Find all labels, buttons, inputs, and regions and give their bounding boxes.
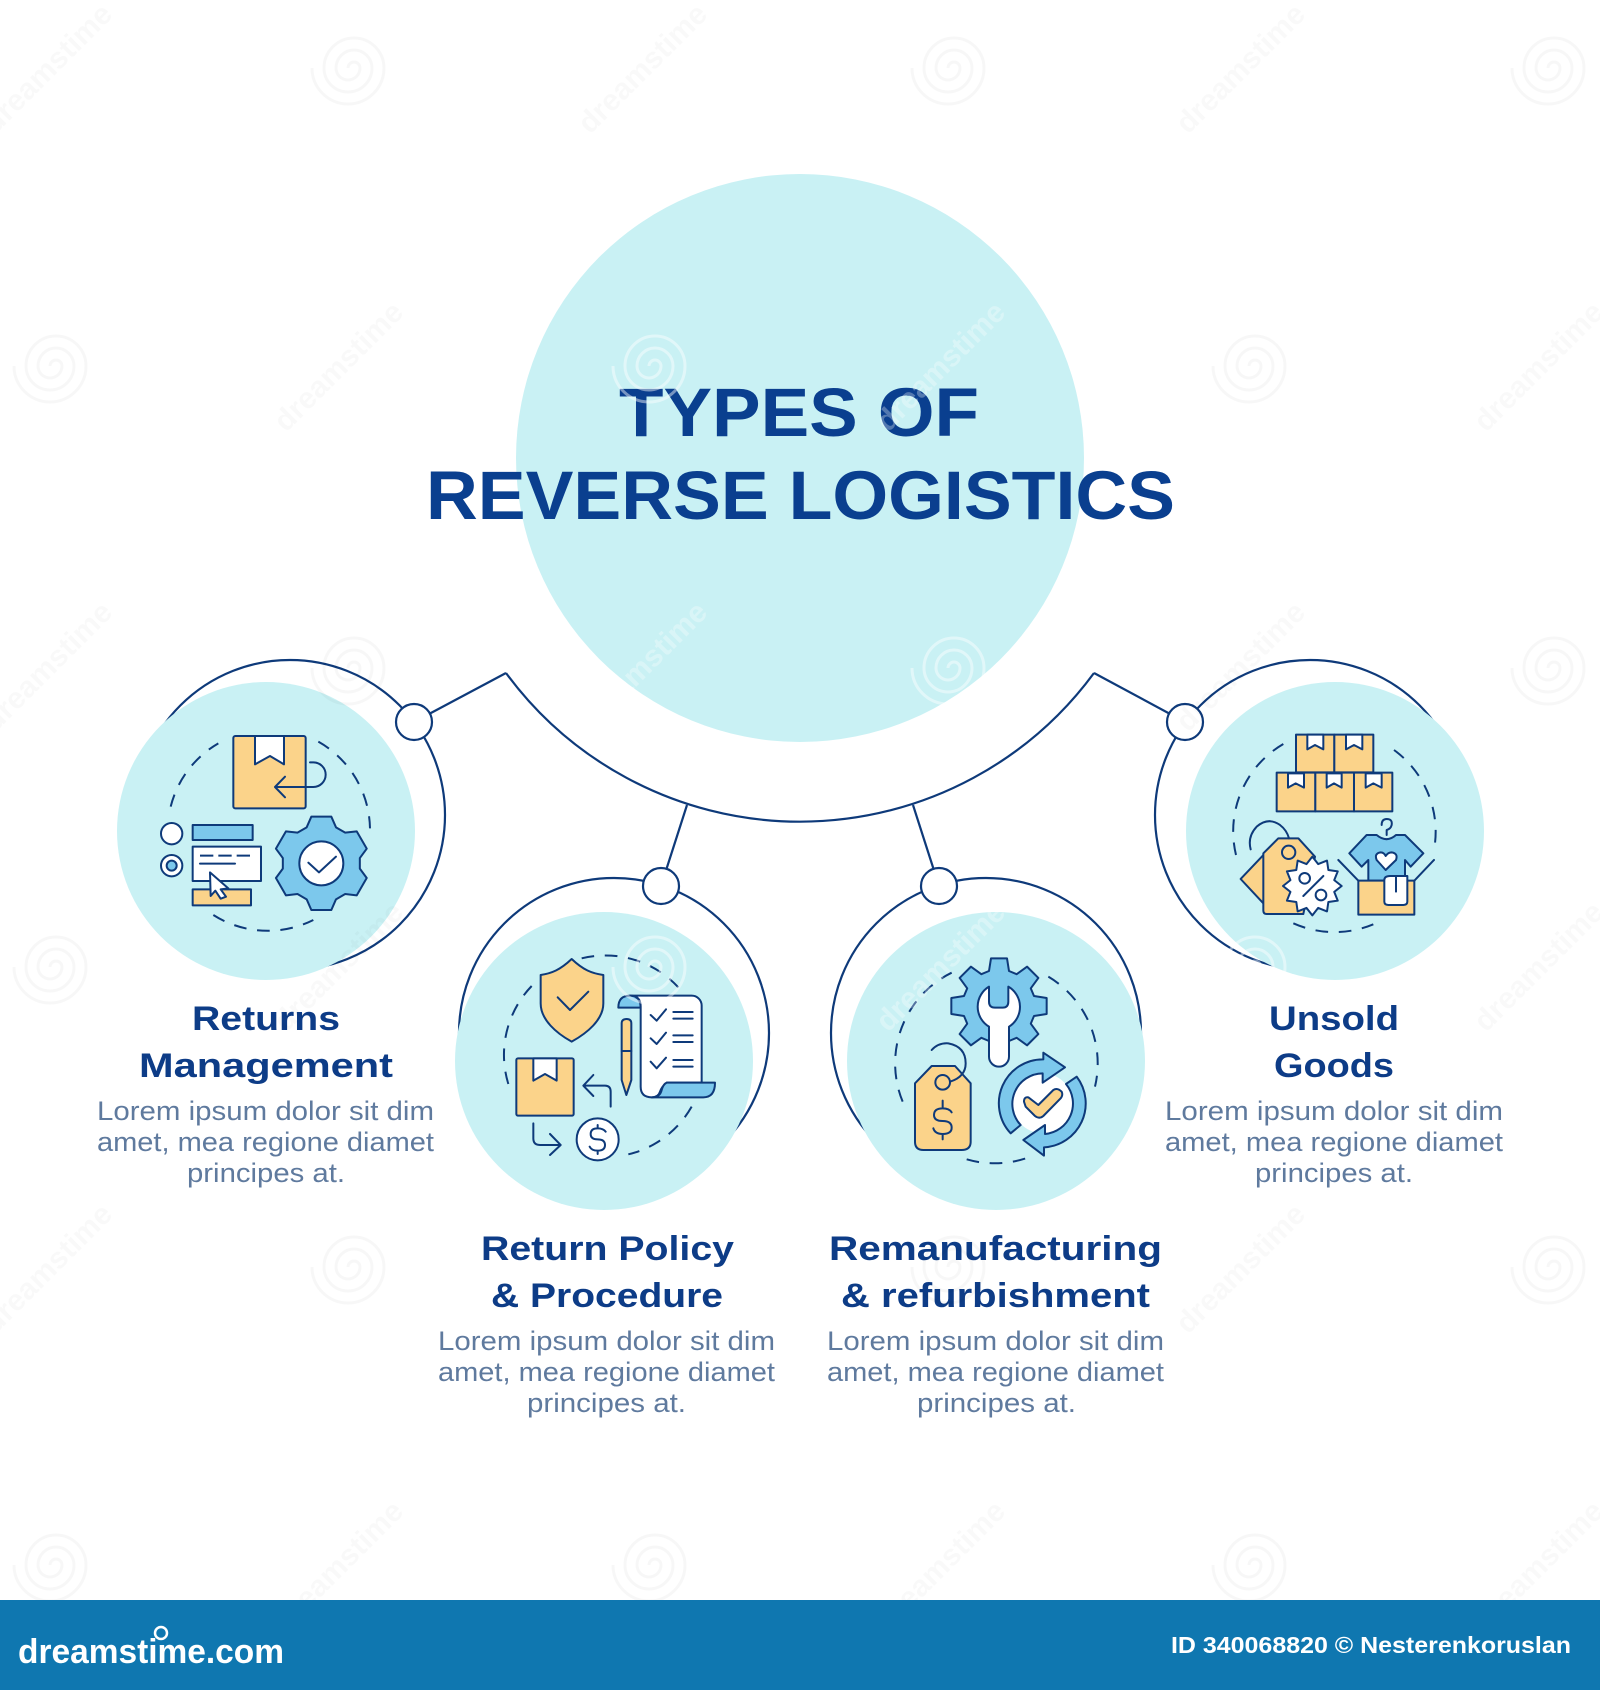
- heading: unsold goods: Unsold: [1269, 1000, 1399, 1038]
- text block 4: principes at.: [1255, 1158, 1413, 1188]
- title: [426, 374, 1175, 534]
- icon: stacked boxes, discount tag and shirt: [1233, 735, 1436, 932]
- panel: return policy and procedure: [438, 868, 776, 1418]
- text block 2: Lorem ipsum dolor sit dim: [438, 1326, 775, 1356]
- text block 2: principes at.: [527, 1388, 686, 1418]
- panel: returns management: [97, 660, 445, 1188]
- heading: return policy and procedure: & Procedure: [491, 1277, 723, 1315]
- text block 1: amet, mea regione diamet: [97, 1127, 435, 1157]
- watermark wordmarks: dreamstime: [1170, 1198, 1312, 1340]
- icon: wrench gear, price tag and refresh: [895, 958, 1098, 1163]
- text block 2: amet, mea regione diamet: [438, 1357, 776, 1387]
- outer ring 2: [459, 878, 769, 1188]
- teal disc 3: [847, 912, 1145, 1210]
- watermark wordmarks: dreamstime: [268, 896, 410, 1038]
- node 3: [921, 868, 957, 904]
- text block 4: Lorem ipsum dolor sit dim: [1165, 1096, 1503, 1126]
- teal disc 1: [117, 682, 415, 980]
- heading: unsold goods: [1269, 1000, 1399, 1085]
- text block 3: amet, mea regione diamet: [827, 1357, 1165, 1387]
- title: REVERSE LOGISTICS: [426, 457, 1175, 534]
- outer ring 3: [831, 878, 1141, 1188]
- text block 1: Lorem ipsum dolor sit dim: [97, 1096, 434, 1126]
- outer ring 1: [135, 660, 445, 970]
- watermark wordmarks: dreamstime: [1170, 596, 1312, 738]
- heading: returns management: Returns: [192, 1000, 340, 1038]
- connector arc: [414, 673, 1185, 886]
- text block 3: principes at.: [917, 1388, 1076, 1418]
- icon: shield, checklist, box and coin: [504, 955, 715, 1160]
- teal disc 4: [1186, 682, 1484, 980]
- title: TYPES OF: [619, 374, 979, 451]
- panel: unsold goods: [1155, 660, 1504, 1188]
- watermark spirals over teal: [613, 336, 1285, 1003]
- heading: unsold goods: Goods: [1274, 1047, 1394, 1085]
- heading: returns management: [139, 1000, 393, 1085]
- watermark wordmarks: dreamstime: [572, 0, 714, 140]
- heading: return policy and procedure: Return Policy: [481, 1230, 734, 1268]
- text block 3: [827, 1326, 1165, 1418]
- watermark wordmark over teal: dreamstime: [572, 596, 714, 738]
- footer logo: dreamstime.com: [18, 1633, 284, 1671]
- teal disc 2: [455, 912, 753, 1210]
- node 2: [643, 868, 679, 904]
- big title circle: [516, 174, 1084, 742]
- heading: remanufacturing and refurbishment: & refurbishment: [841, 1277, 1150, 1315]
- watermark wordmarks: dreamstime: [1170, 0, 1312, 140]
- heading: returns management: Management: [139, 1047, 393, 1085]
- icon: box, form and gear: [161, 736, 370, 931]
- heading: remanufacturing and refurbishment: [829, 1230, 1162, 1315]
- watermark wordmarks: dreamstime: [268, 1495, 410, 1637]
- node 1: [396, 704, 432, 740]
- watermark wordmark over teal: dreamstime: [870, 296, 1012, 438]
- panel: remanufacturing and refurbishment: [827, 868, 1165, 1418]
- watermark wordmark over teal: [572, 296, 1012, 1038]
- text block 1: principes at.: [187, 1158, 345, 1188]
- text block 2: [438, 1326, 776, 1418]
- watermark wordmarks: dreamstime: [268, 296, 410, 438]
- node 4: [1167, 704, 1203, 740]
- footer bar: [0, 1600, 1600, 1690]
- footer credit: ID 340068820 © Nesterenkoruslan: [1171, 1632, 1571, 1658]
- text block 3: Lorem ipsum dolor sit dim: [827, 1326, 1164, 1356]
- text block 1: [97, 1096, 435, 1188]
- heading: remanufacturing and refurbishment: Remanufacturing: [829, 1230, 1162, 1268]
- watermark wordmarks: dreamstime: [870, 1495, 1012, 1637]
- outer ring 4: [1155, 660, 1465, 970]
- text block 4: amet, mea regione diamet: [1165, 1127, 1504, 1157]
- heading: return policy and procedure: [481, 1230, 734, 1315]
- watermark wordmark over teal: dreamstime: [870, 896, 1012, 1038]
- text block 4: [1165, 1096, 1504, 1188]
